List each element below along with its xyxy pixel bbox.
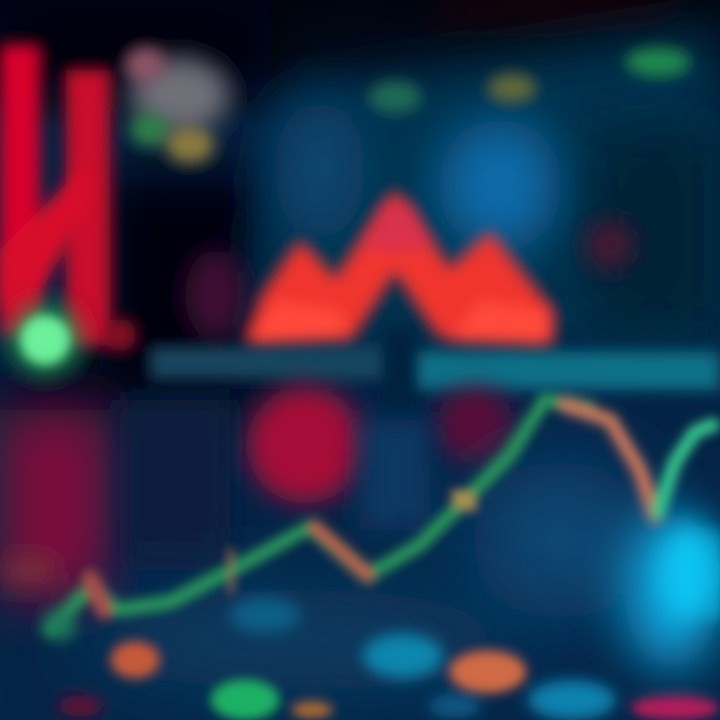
- cyan glow bottom right: [80, 460, 720, 690]
- panel: upper blue chart panel: [230, 25, 720, 345]
- panel: lower crimson zones: [0, 387, 513, 600]
- red mountain area chart: [185, 190, 552, 342]
- green and orange price line: [50, 400, 713, 630]
- faint red dot: [586, 221, 634, 269]
- top legend blobs: [369, 81, 421, 113]
- right edge cyan fill: [700, 530, 720, 620]
- legend: grey and olive blobs: [125, 47, 230, 163]
- panel: red candles top left: [0, 45, 136, 351]
- icon: green glowing dot: [11, 306, 79, 374]
- bottom candle blobs: [44, 597, 719, 720]
- teal horizontal bands: [150, 330, 720, 410]
- top dark band: [0, 0, 680, 410]
